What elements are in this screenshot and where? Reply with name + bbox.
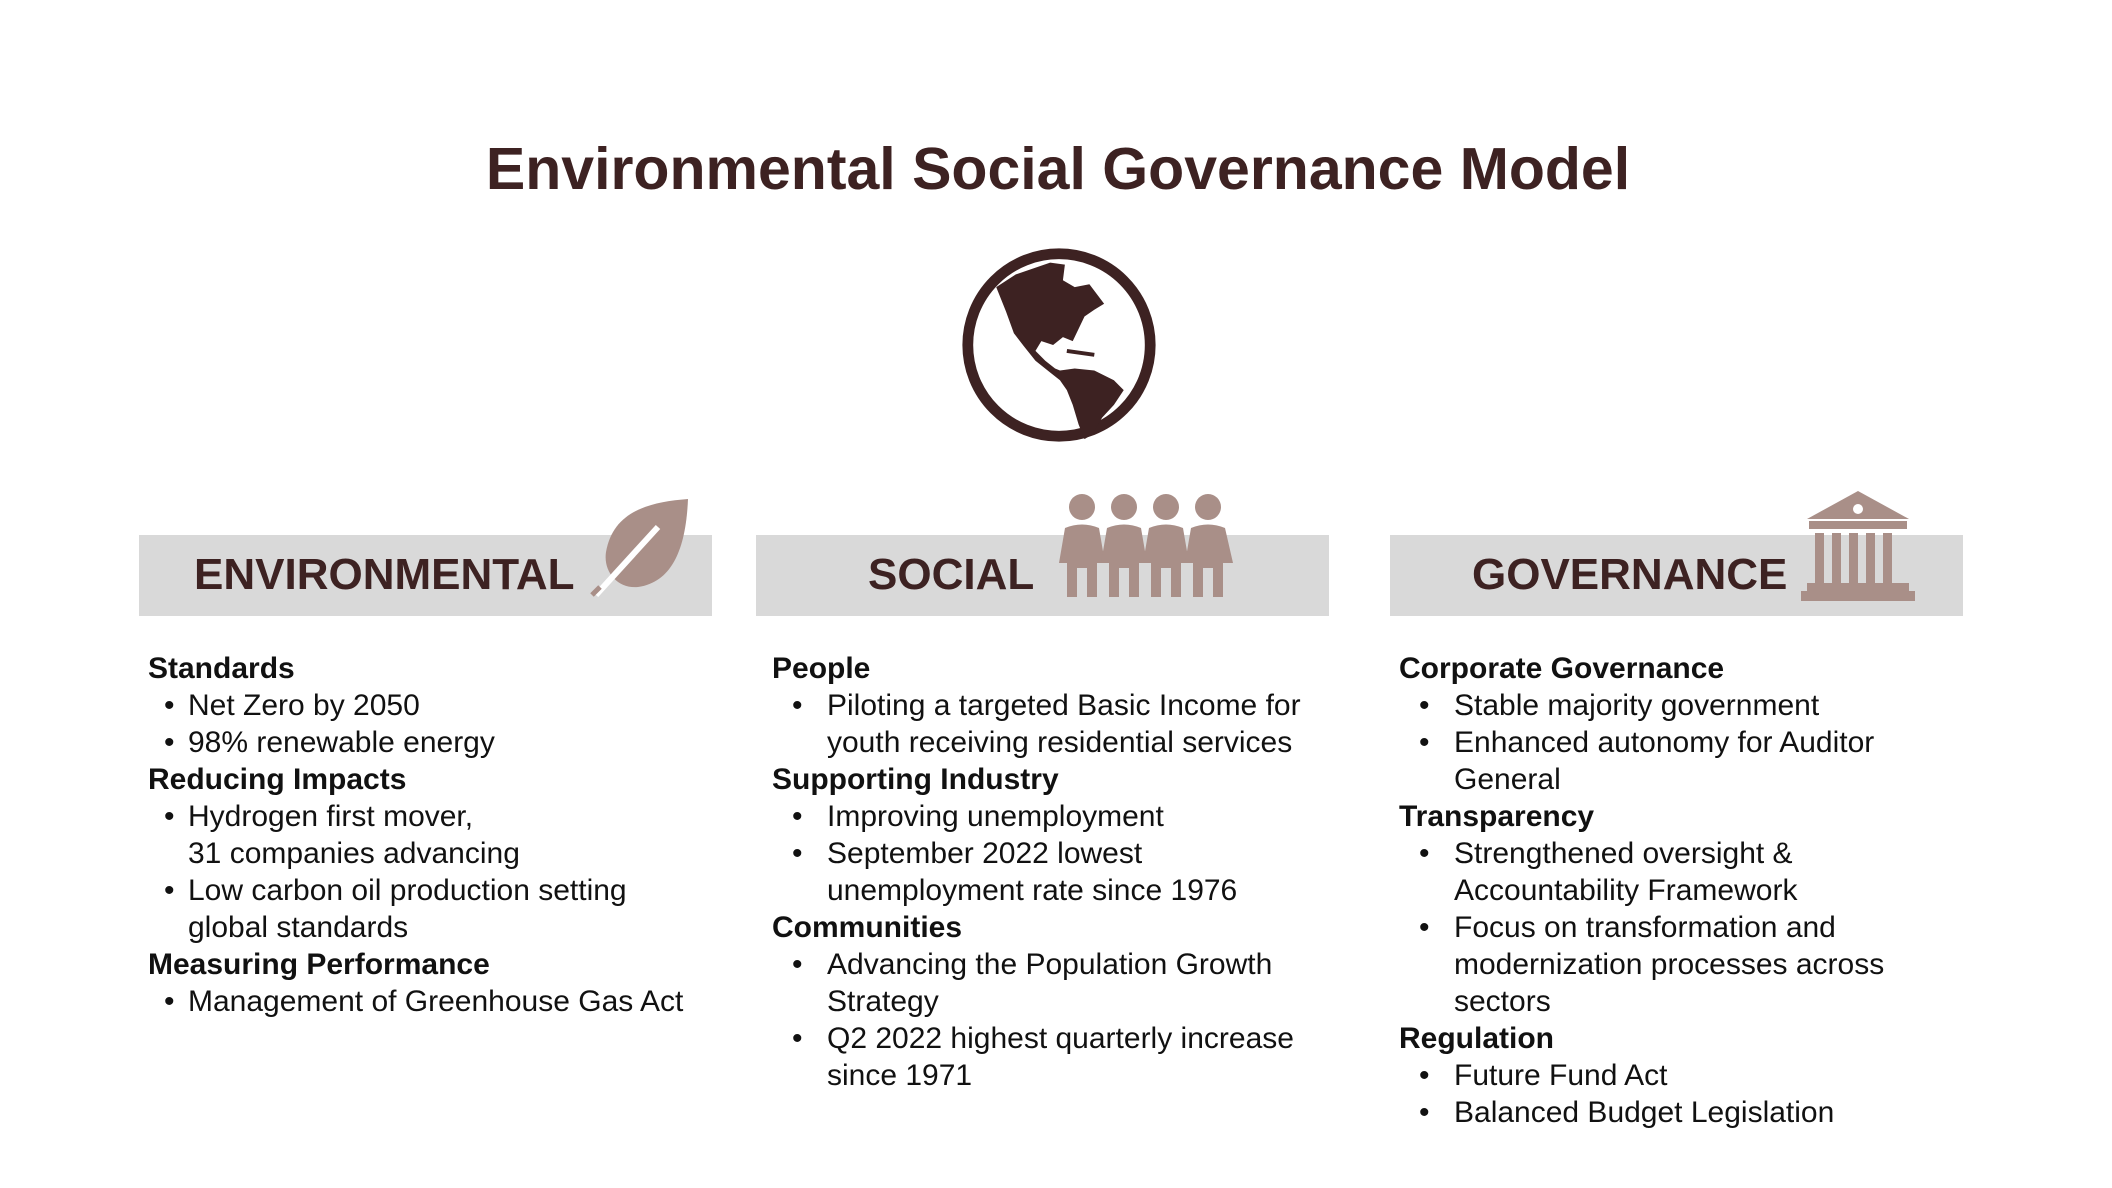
text block: governance: Corporate Governance <box>1399 652 1724 685</box>
text block: environmental <box>148 652 684 1018</box>
text block: social: Advancing the Population Growth <box>827 948 1272 981</box>
icon: globe <box>962 248 1156 442</box>
icon: leaf <box>590 499 688 597</box>
text block: social <box>772 652 1301 1092</box>
text block: governance: Transparency <box>1399 800 1594 833</box>
text block: governance: General <box>1454 763 1561 796</box>
text block: environmental: Low carbon oil production setting <box>188 874 627 907</box>
text block: social: Strategy <box>827 985 939 1018</box>
panel: environmental header <box>139 535 712 616</box>
text block: social: youth receiving residential services <box>827 726 1292 759</box>
text block: governance: Future Fund Act <box>1454 1059 1667 1092</box>
text block: governance: Enhanced autonomy for Auditor <box>1454 726 1874 759</box>
text block: environmental: Measuring Performance <box>148 948 490 981</box>
text block: social: Improving unemployment <box>827 800 1164 833</box>
icon: people <box>1059 494 1233 597</box>
text block: environmental: global standards <box>188 911 408 944</box>
panel: governance header: GOVERNANCE <box>1472 550 1787 599</box>
text block: environmental: Standards <box>148 652 295 685</box>
text block: environmental: Reducing Impacts <box>148 763 406 796</box>
icon: building <box>1801 491 1915 601</box>
text block: social: Communities <box>772 911 962 944</box>
text block: environmental: Net Zero by 2050 <box>188 689 420 722</box>
panel: social header: SOCIAL <box>868 550 1034 599</box>
text block: governance: Accountability Framework <box>1454 874 1797 907</box>
text block: social: Q2 2022 highest quarterly increase <box>827 1022 1294 1055</box>
text block: social: Piloting a targeted Basic Income for <box>827 689 1301 722</box>
panel: social header <box>756 535 1329 616</box>
text block: environmental: 98% renewable energy <box>188 726 495 759</box>
text block: social: since 1971 <box>827 1059 972 1092</box>
text block: governance: Balanced Budget Legislation <box>1454 1096 1834 1129</box>
text block: governance: sectors <box>1454 985 1551 1018</box>
panel: governance header <box>1390 535 1963 616</box>
text block: governance: modernization processes across <box>1454 948 1884 981</box>
text block: environmental: 31 companies advancing <box>188 837 520 870</box>
text block: governance: Regulation <box>1399 1022 1554 1055</box>
title: Environmental Social Governance Model <box>486 136 1630 202</box>
text block: environmental: Management of Greenhouse Gas Act <box>188 985 683 1018</box>
text block: governance <box>1399 652 1884 1129</box>
text block: governance: Stable majority government <box>1454 689 1819 722</box>
text block: social: People <box>772 652 870 685</box>
text block: environmental: Hydrogen first mover, <box>188 800 473 833</box>
text block: social: September 2022 lowest <box>827 837 1142 870</box>
panel: environmental header: ENVIRONMENTAL <box>194 550 575 599</box>
text block: social: Supporting Industry <box>772 763 1059 796</box>
text block: governance: Strengthened oversight & <box>1454 837 1793 870</box>
text block: social: unemployment rate since 1976 <box>827 874 1237 907</box>
text block: governance: Focus on transformation and <box>1454 911 1836 944</box>
